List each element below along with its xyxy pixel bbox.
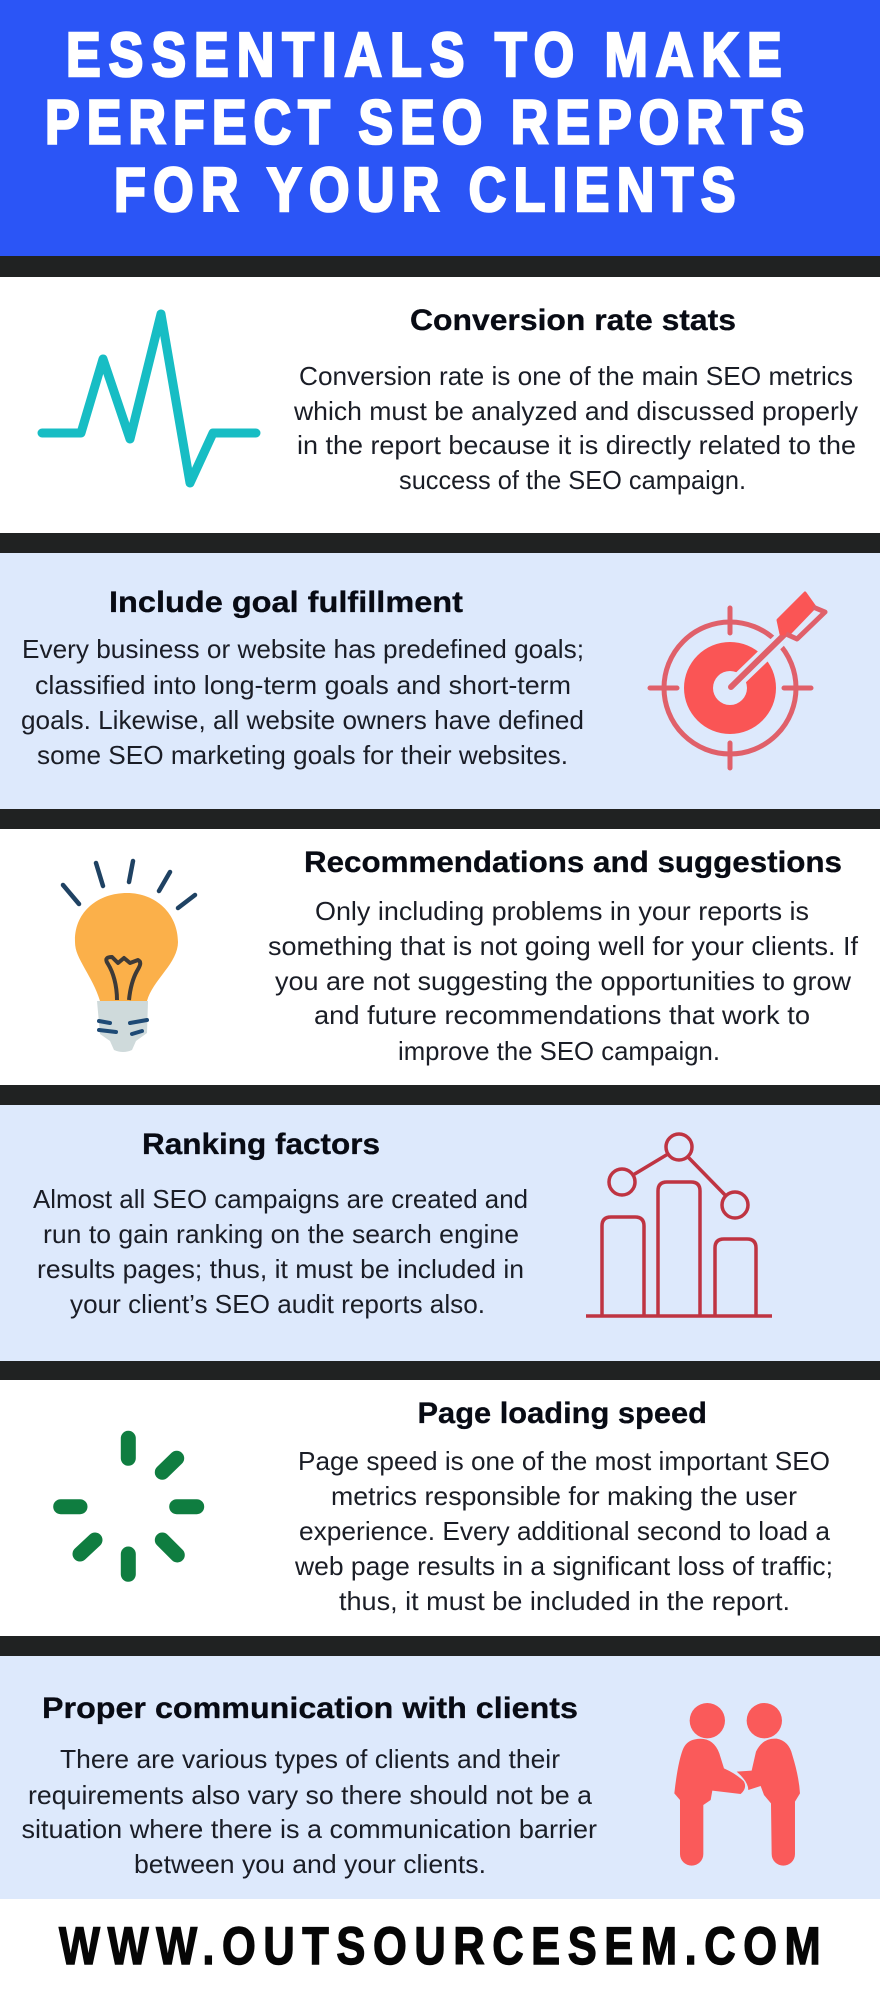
panel: ranking factors — [0, 1105, 880, 1361]
text block: recommendations: something that is not going well for your clients. If — [268, 931, 859, 961]
title: FOR YOUR CLIENTS — [114, 156, 736, 225]
text block: conversion rate: success of the SEO campaign. — [399, 465, 746, 495]
heading: proper communication with clients: Proper communication with clients — [42, 1692, 578, 1725]
text block: conversion rate: Conversion rate is one of the main SEO metrics — [299, 361, 853, 391]
text block: page speed: metrics responsible for making the user — [331, 1481, 797, 1511]
heading: recommendations and suggestions: Recommendations and suggestions — [304, 846, 842, 879]
text block: conversion rate: which must be analyzed and discussed properly — [293, 396, 858, 426]
text block: communication — [22, 1744, 597, 1879]
text block: communication: situation where there is a communication barrier — [22, 1814, 597, 1844]
text block: ranking — [33, 1184, 528, 1319]
text block: communication: between you and your clients. — [134, 1849, 486, 1879]
text block: ranking: results pages; thus, it must be included in — [37, 1254, 524, 1284]
text block: recommendations: improve the SEO campaign. — [398, 1036, 720, 1066]
heading: ranking factors: Ranking factors — [142, 1128, 380, 1161]
icon: two people shaking hands — [674, 1703, 800, 1866]
icon: loading spinner — [61, 1438, 197, 1574]
text block: page speed: Page speed is one of the most important SEO — [298, 1446, 830, 1476]
text block: page speed — [294, 1446, 833, 1616]
panel: footer — [0, 1899, 880, 2000]
text block: conversion rate: in the report because it is directly related to the — [297, 430, 856, 460]
title — [45, 21, 804, 225]
title: PERFECT SEO REPORTS — [45, 88, 804, 158]
panel: include goal fulfillment — [0, 553, 880, 809]
text block: communication: requirements also vary so there should not be a — [28, 1780, 593, 1810]
text block: page speed: thus, it must be included in the report. — [339, 1586, 790, 1616]
text block: goals: classified into long-term goals and short-term — [35, 670, 571, 700]
text block: ranking: your client’s SEO audit reports also. — [70, 1289, 485, 1319]
text block: recommendations: and future recommendations that work to — [314, 1000, 810, 1030]
heading: page loading speed: Page loading speed — [418, 1397, 707, 1430]
panel: page loading speed — [0, 1380, 880, 1636]
text block: ranking: Almost all SEO campaigns are created and — [33, 1184, 528, 1214]
footer url: WWW.OUTSOURCESEM.COM — [59, 1917, 821, 1976]
heading: include goal fulfillment: Include goal fulfillment — [109, 586, 463, 619]
heading: conversion rate stats: Conversion rate stats — [410, 304, 736, 337]
panel: recommendations and suggestions — [0, 829, 880, 1085]
panel: proper communication with clients — [0, 1656, 880, 1899]
panel: title header — [0, 0, 880, 256]
text block: communication: There are various types of clients and their — [60, 1744, 560, 1774]
text block: conversion rate — [293, 361, 858, 495]
icon: pulse line — [42, 314, 256, 483]
title: ESSENTIALS TO MAKE — [66, 21, 782, 90]
text block: recommendations: Only including problems in your reports is — [315, 896, 809, 926]
panel: conversion rate stats — [0, 277, 880, 533]
icon: light bulb — [63, 861, 195, 1052]
icon: target with arrow — [650, 593, 825, 768]
icon: bar chart with line — [586, 1134, 772, 1316]
text block: page speed: experience. Every additional second to load a — [299, 1516, 831, 1546]
text block: ranking: run to gain ranking on the search engine — [43, 1219, 519, 1249]
text block: recommendations — [268, 896, 859, 1066]
text block: goals: Every business or website has predefined goals; — [22, 634, 584, 664]
text block: goals: goals. Likewise, all website owners have defined — [21, 705, 584, 735]
text block: page speed: web page results in a significant loss of traffic; — [294, 1551, 833, 1581]
text block: recommendations: you are not suggesting the opportunities to grow — [275, 966, 851, 996]
text block: goals: some SEO marketing goals for their websites. — [37, 740, 568, 770]
text block: goals — [21, 634, 584, 770]
